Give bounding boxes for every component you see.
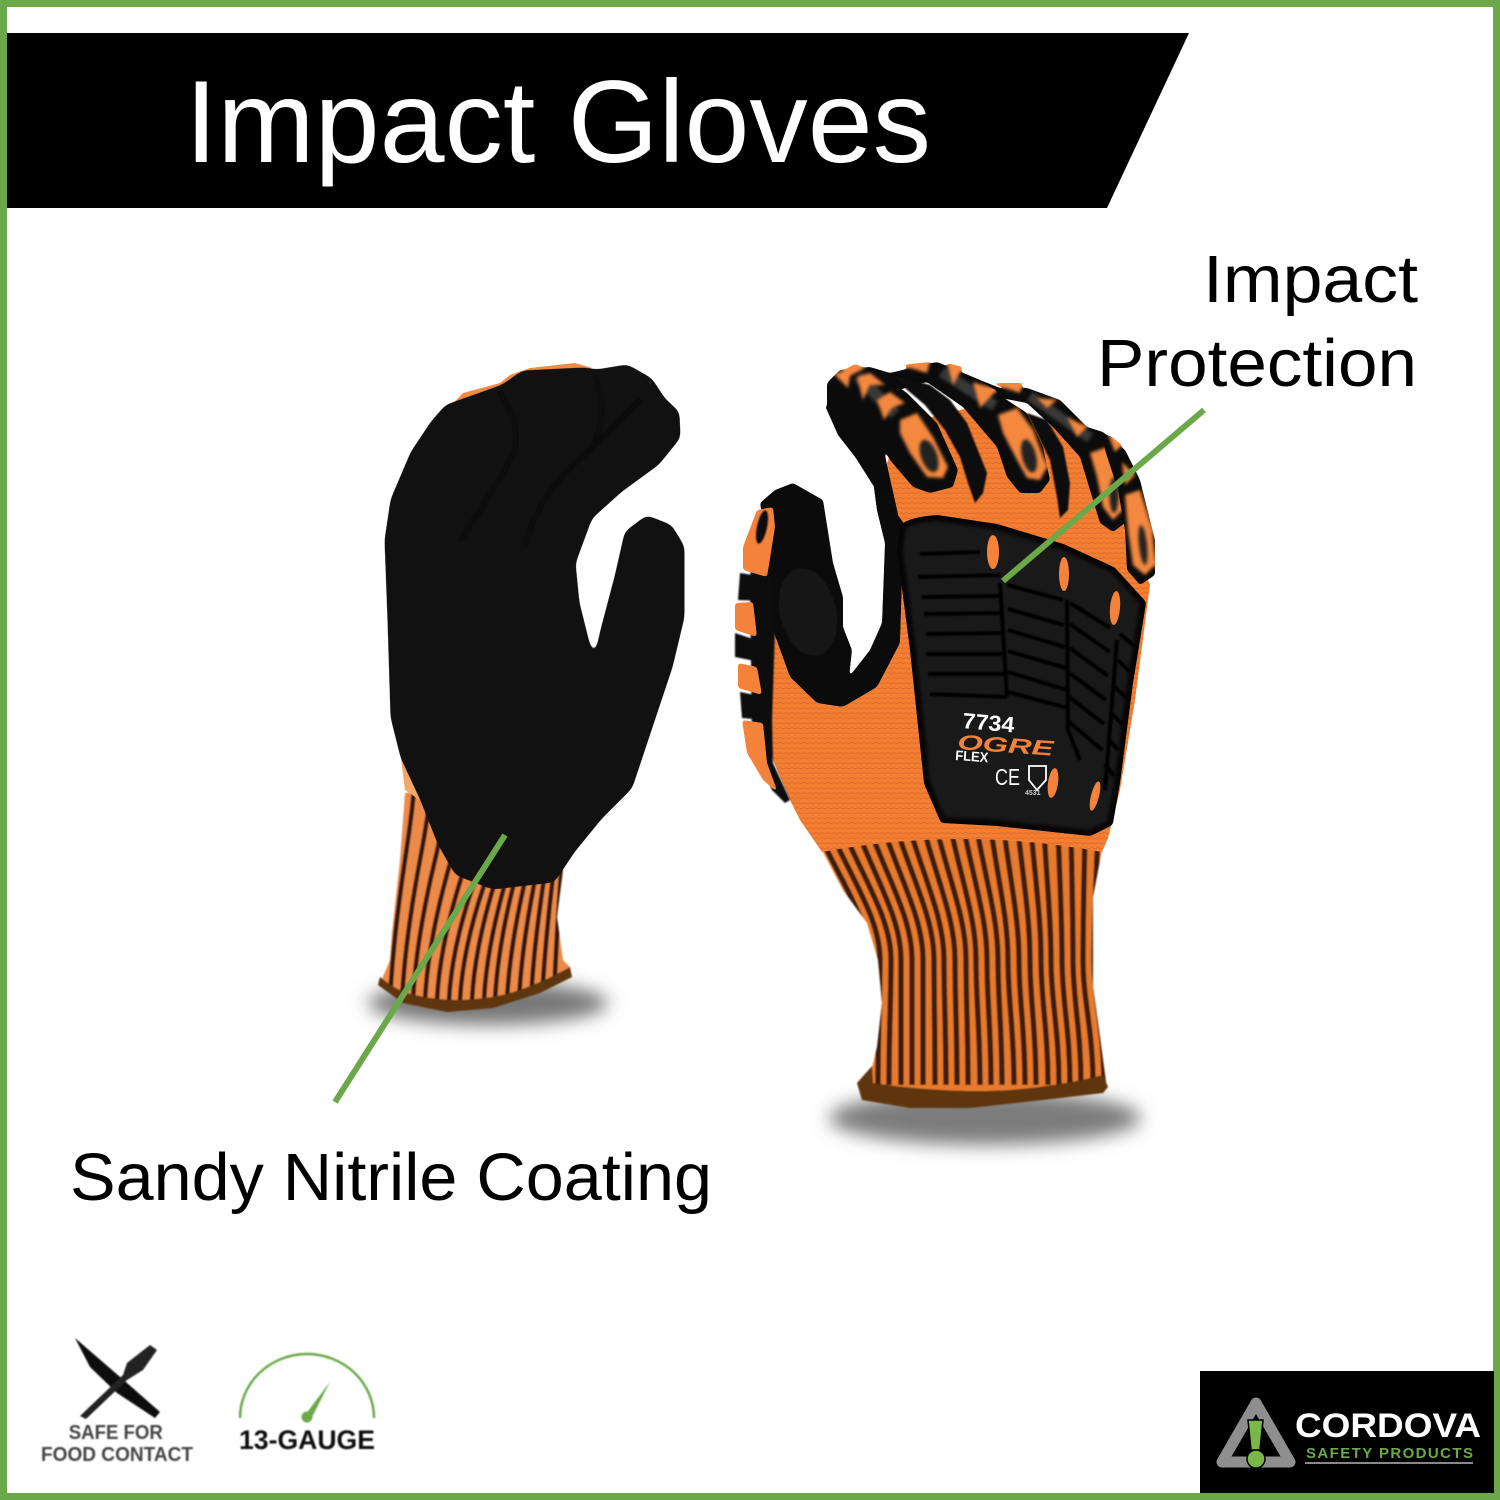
logo: Cordova Safety Products	[1200, 1371, 1494, 1493]
gap side black edge	[826, 400, 902, 560]
CE mark: CE	[995, 764, 1020, 790]
cuff hem	[378, 967, 572, 1012]
palm fold shading	[460, 375, 640, 545]
back-of-hand impact plate	[900, 518, 1143, 833]
cuff hem	[857, 1066, 1108, 1108]
left glove: palm side	[368, 363, 682, 1025]
flex label: FLEX	[955, 747, 989, 765]
model number: 7734	[962, 708, 1016, 738]
icon caption: FOOD CONTACT	[41, 1444, 193, 1466]
logo tagline: SAFETY PRODUCTS	[1306, 1445, 1473, 1462]
plate orange vents	[987, 535, 1121, 812]
finger three guard	[990, 383, 1125, 532]
dial arc	[240, 1354, 374, 1418]
callout: impact protection: Impact	[1203, 242, 1418, 317]
icon: crossed knife and fork	[75, 1338, 160, 1419]
logo warning triangle	[1222, 1403, 1290, 1462]
thumb orange guard segments	[735, 507, 778, 793]
title: Impact Gloves	[185, 56, 931, 187]
plate ridges	[918, 552, 1134, 790]
orange knuckle trim	[437, 363, 592, 430]
icon caption: SAFE FOR	[69, 1422, 163, 1444]
thumb black guard segments	[735, 509, 770, 720]
ground shadow	[829, 1091, 1141, 1145]
thumb outer black edge	[750, 505, 790, 803]
finger four guard	[1103, 432, 1155, 585]
orange wrist sliver	[395, 713, 424, 803]
finger sliver one	[892, 375, 987, 503]
knit cuff	[804, 830, 1108, 1108]
product name: OGRE	[957, 731, 1056, 761]
icon: 13-gauge dial	[239, 1354, 375, 1455]
thumb black palm and webbing	[760, 480, 905, 707]
finger one guard	[827, 364, 958, 523]
right glove: back side	[735, 362, 1155, 1145]
finger two guard	[890, 362, 1050, 493]
dial needle	[305, 1382, 330, 1419]
icon: safe for food contact	[41, 1338, 193, 1466]
knit cuff	[378, 780, 572, 1012]
ground shadow	[368, 981, 608, 1025]
thumb pad highlight	[770, 563, 846, 661]
shield mark	[1029, 766, 1046, 790]
fingertip black backing band	[827, 362, 1140, 490]
pointer line: impact protection	[1003, 410, 1204, 581]
orange knit body	[763, 400, 1150, 852]
callout: impact protection: Protection	[1097, 326, 1417, 401]
gauge caption: 13-GAUGE	[239, 1425, 375, 1455]
finger sliver two	[1027, 413, 1070, 518]
certification number: 4531	[1025, 790, 1041, 797]
cuff stripes	[390, 780, 563, 1000]
callout: sandy nitrile coating: Sandy Nitrile Coating	[70, 1140, 712, 1215]
pointer line: sandy nitrile coating	[335, 835, 505, 1102]
title banner	[7, 33, 1189, 208]
logo exclamation mark	[1247, 1420, 1265, 1468]
black sandy nitrile palm	[387, 367, 682, 887]
cuff stripes	[804, 830, 1104, 1085]
logo wordmark: CORDOVA	[1295, 1407, 1481, 1445]
